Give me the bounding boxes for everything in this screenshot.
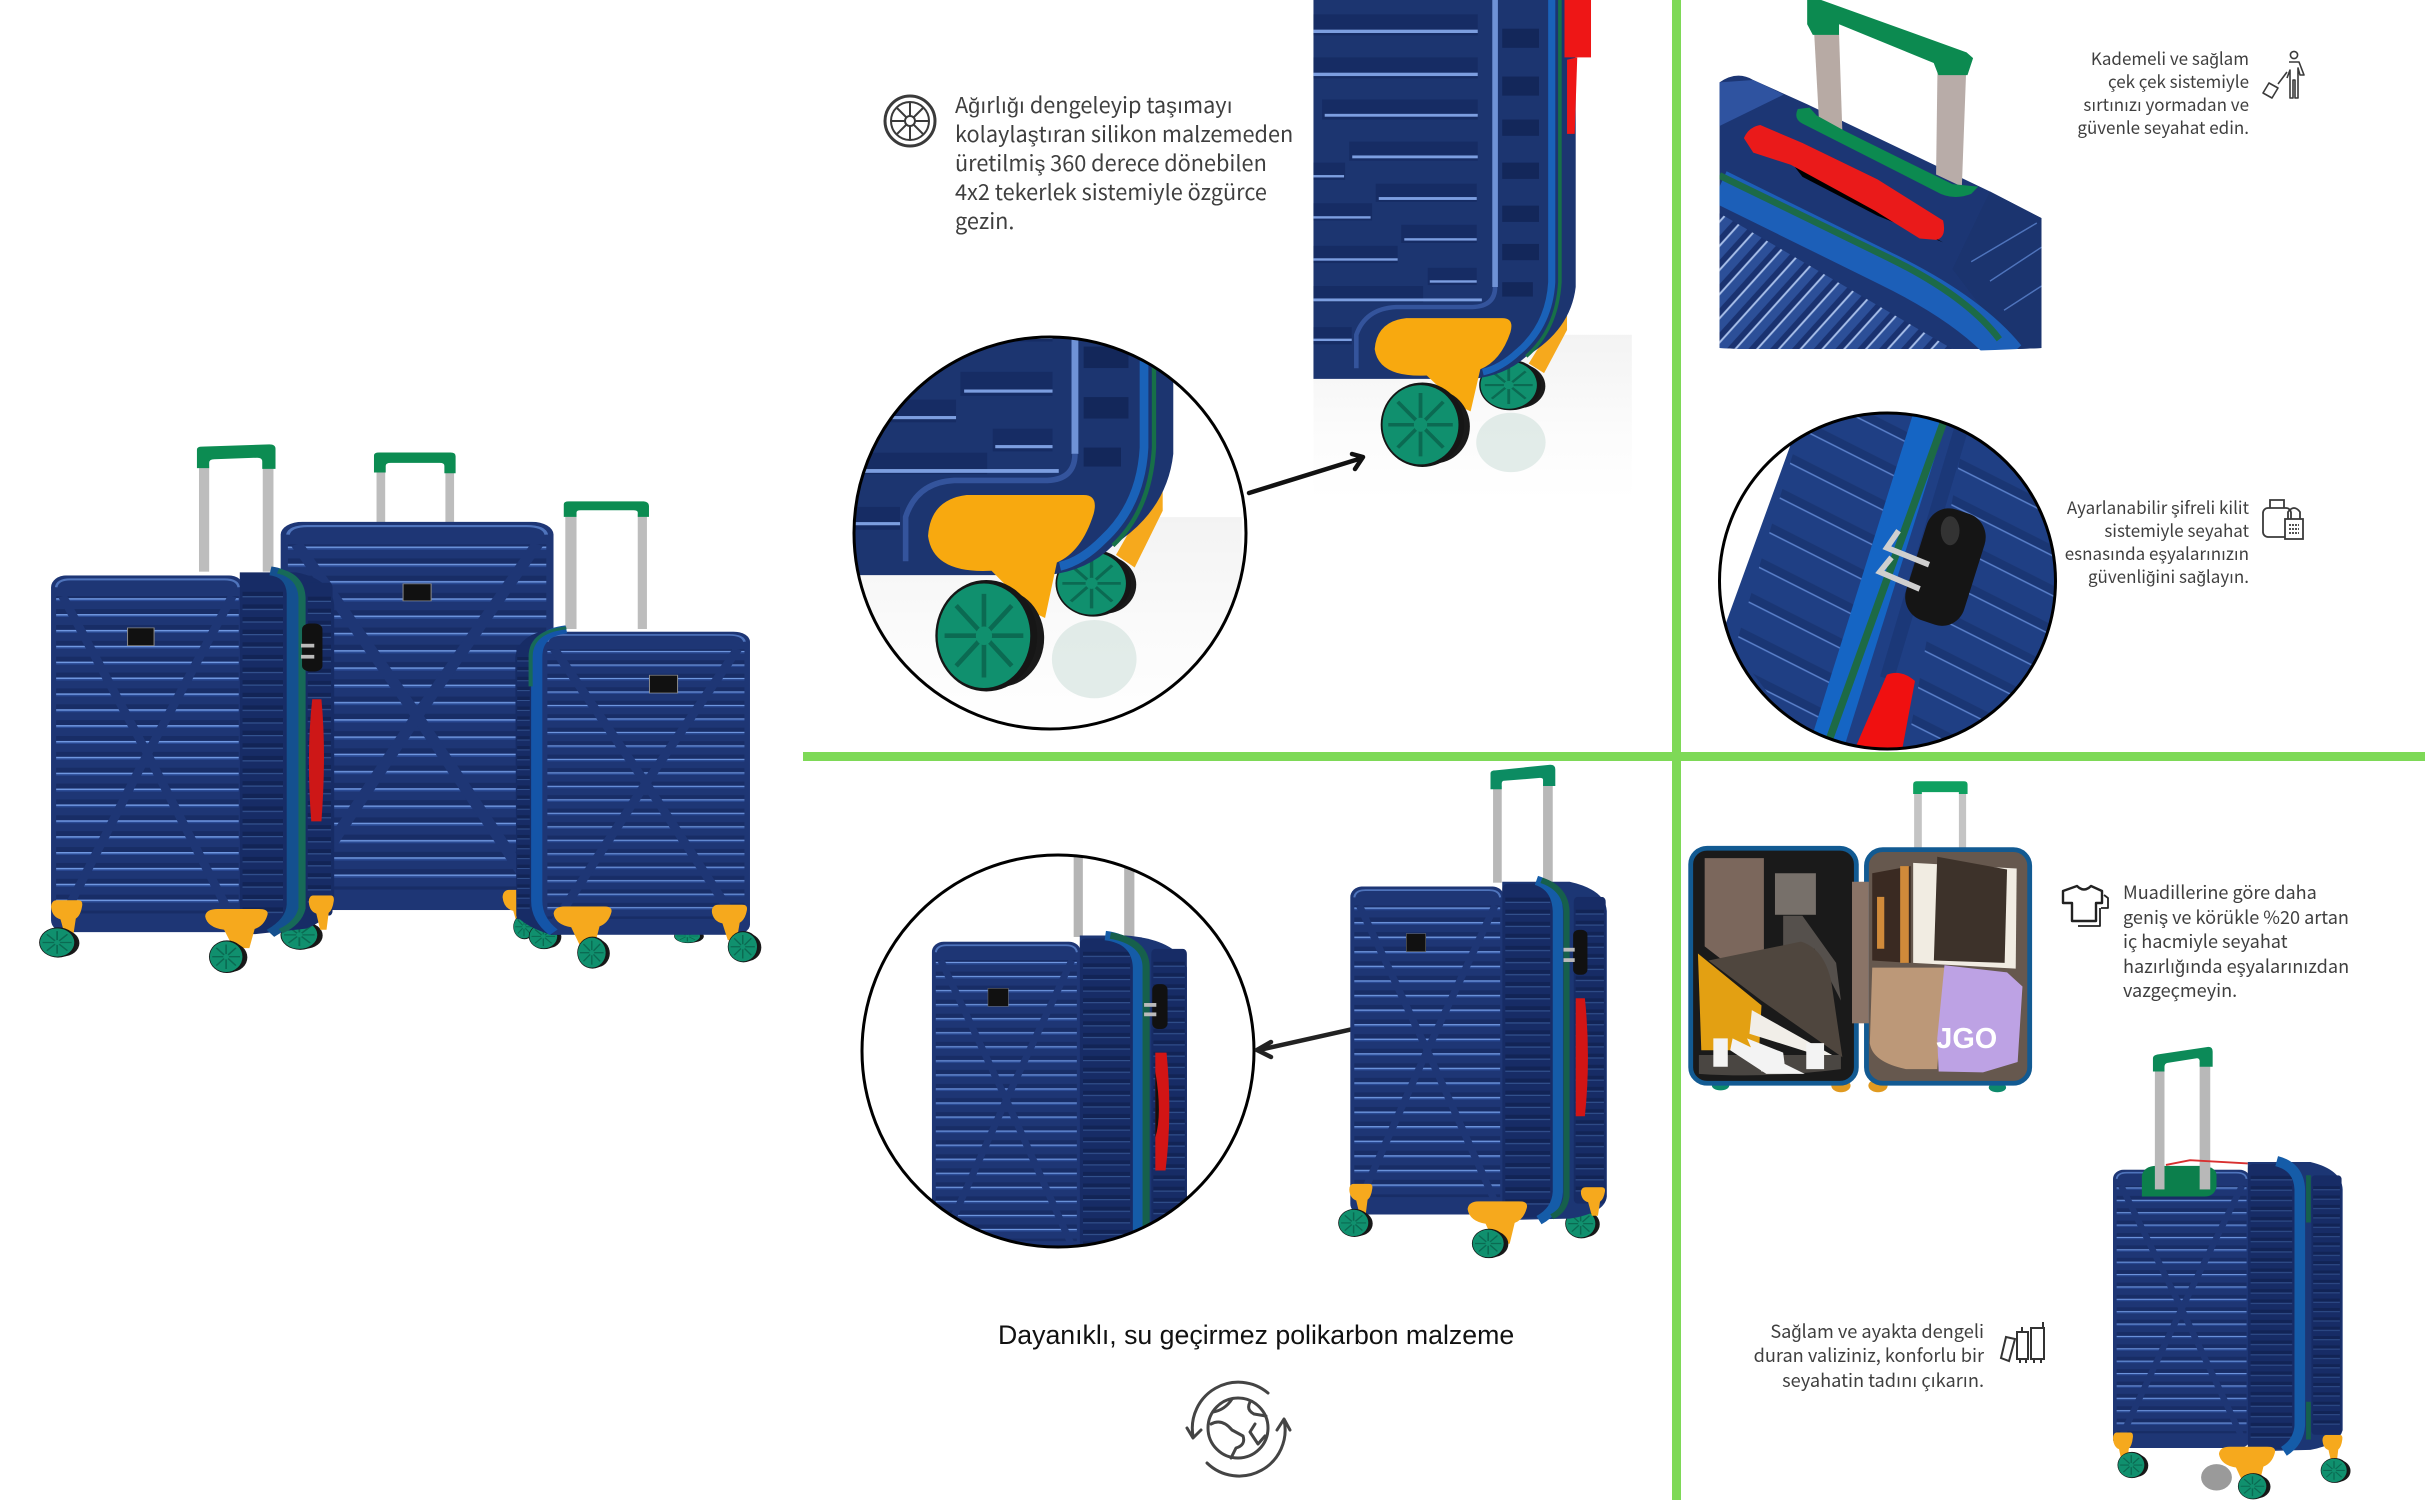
photo: full suitcase front	[1338, 765, 1607, 1258]
text: interior volume: Muadillerine göre daha	[2123, 879, 2317, 905]
heading: durable waterproof polycarbonate: Dayanıklı, su geçirmez polikarbon malzeme	[998, 1320, 1514, 1350]
text: lock feature: güvenliğini sağlayın.	[2088, 563, 2249, 588]
icon: t-shirt	[2063, 886, 2108, 926]
text: trolley system: Kademeli ve sağlam	[2091, 45, 2249, 70]
text: interior volume: vazgeçmeyin.	[2123, 977, 2237, 1003]
suitcase handle	[1913, 781, 1968, 849]
text: wheel system: Ağırlığı dengeleyip taşımayı	[955, 89, 1233, 120]
suitcase: small right	[515, 501, 761, 969]
arrow: suitcase to circle	[1257, 1019, 1398, 1057]
icon: globe with arrows	[1187, 1382, 1290, 1476]
divider: vertical green line	[1672, 0, 1681, 1500]
text: stable standing: duran valiziniz, konforlu bir	[1754, 1342, 1985, 1368]
suitcase: medium left	[39, 444, 334, 973]
text: interior volume: hazırlığında eşyalarınızdan	[2123, 953, 2349, 979]
photo: suitcase back view	[2113, 1047, 2351, 1499]
suitcase in circle: durable shell zoom	[862, 854, 1254, 1260]
text: lock feature: esnasında eşyalarınızın	[2065, 540, 2249, 565]
text: interior volume: iç hacmiyle seyahat	[2123, 928, 2288, 954]
icon: wheel	[885, 96, 935, 146]
text: interior volume: geniş ve körükle %20 artan	[2123, 904, 2349, 930]
text: wheel system: kolaylaştıran silikon malzemeden	[955, 118, 1293, 149]
text: wheel system: gezin.	[955, 205, 1014, 236]
text: stable standing: Sağlam ve ayakta dengeli	[1770, 1318, 1984, 1344]
suitcase: large middle	[281, 453, 554, 939]
text: lock feature: sistemiyle seyahat	[2104, 517, 2250, 542]
photo: wheel close-up top	[1313, 0, 1632, 500]
circle: wheel zoom	[852, 336, 1248, 730]
icon: three suitcases	[2001, 1322, 2044, 1363]
text: trolley system: sırtınızı yormadan ve	[2083, 91, 2249, 116]
text: wheel system: 4x2 tekerlek sistemiyle özgürce	[955, 176, 1267, 207]
photo: three suitcases set	[39, 444, 761, 973]
left shell	[1691, 848, 1856, 1083]
icon: bag with lock	[2263, 500, 2303, 539]
photo: handle close-up	[1720, 0, 2042, 356]
print on lilac fabric: JGO	[1936, 1023, 1997, 1055]
right shell	[1852, 850, 2030, 1083]
circle: combination lock close-up	[1718, 412, 2074, 756]
text: lock feature: Ayarlanabilir şifreli kilit	[2067, 494, 2250, 519]
text: stable standing: seyahatin tadını çıkarın.	[1782, 1367, 1984, 1393]
text: wheel system: üretilmiş 360 derece dönebilen	[955, 147, 1267, 178]
divider: horizontal green line	[803, 752, 2425, 761]
arrow: wheel zoom to photo	[1249, 454, 1363, 493]
text: trolley system: çek çek sistemiyle	[2108, 68, 2249, 93]
text: trolley system: güvenle seyahat edin.	[2077, 114, 2249, 139]
photo: open suitcase with packed items	[1691, 781, 2030, 1092]
icon: traveler with suitcase	[2263, 51, 2304, 98]
